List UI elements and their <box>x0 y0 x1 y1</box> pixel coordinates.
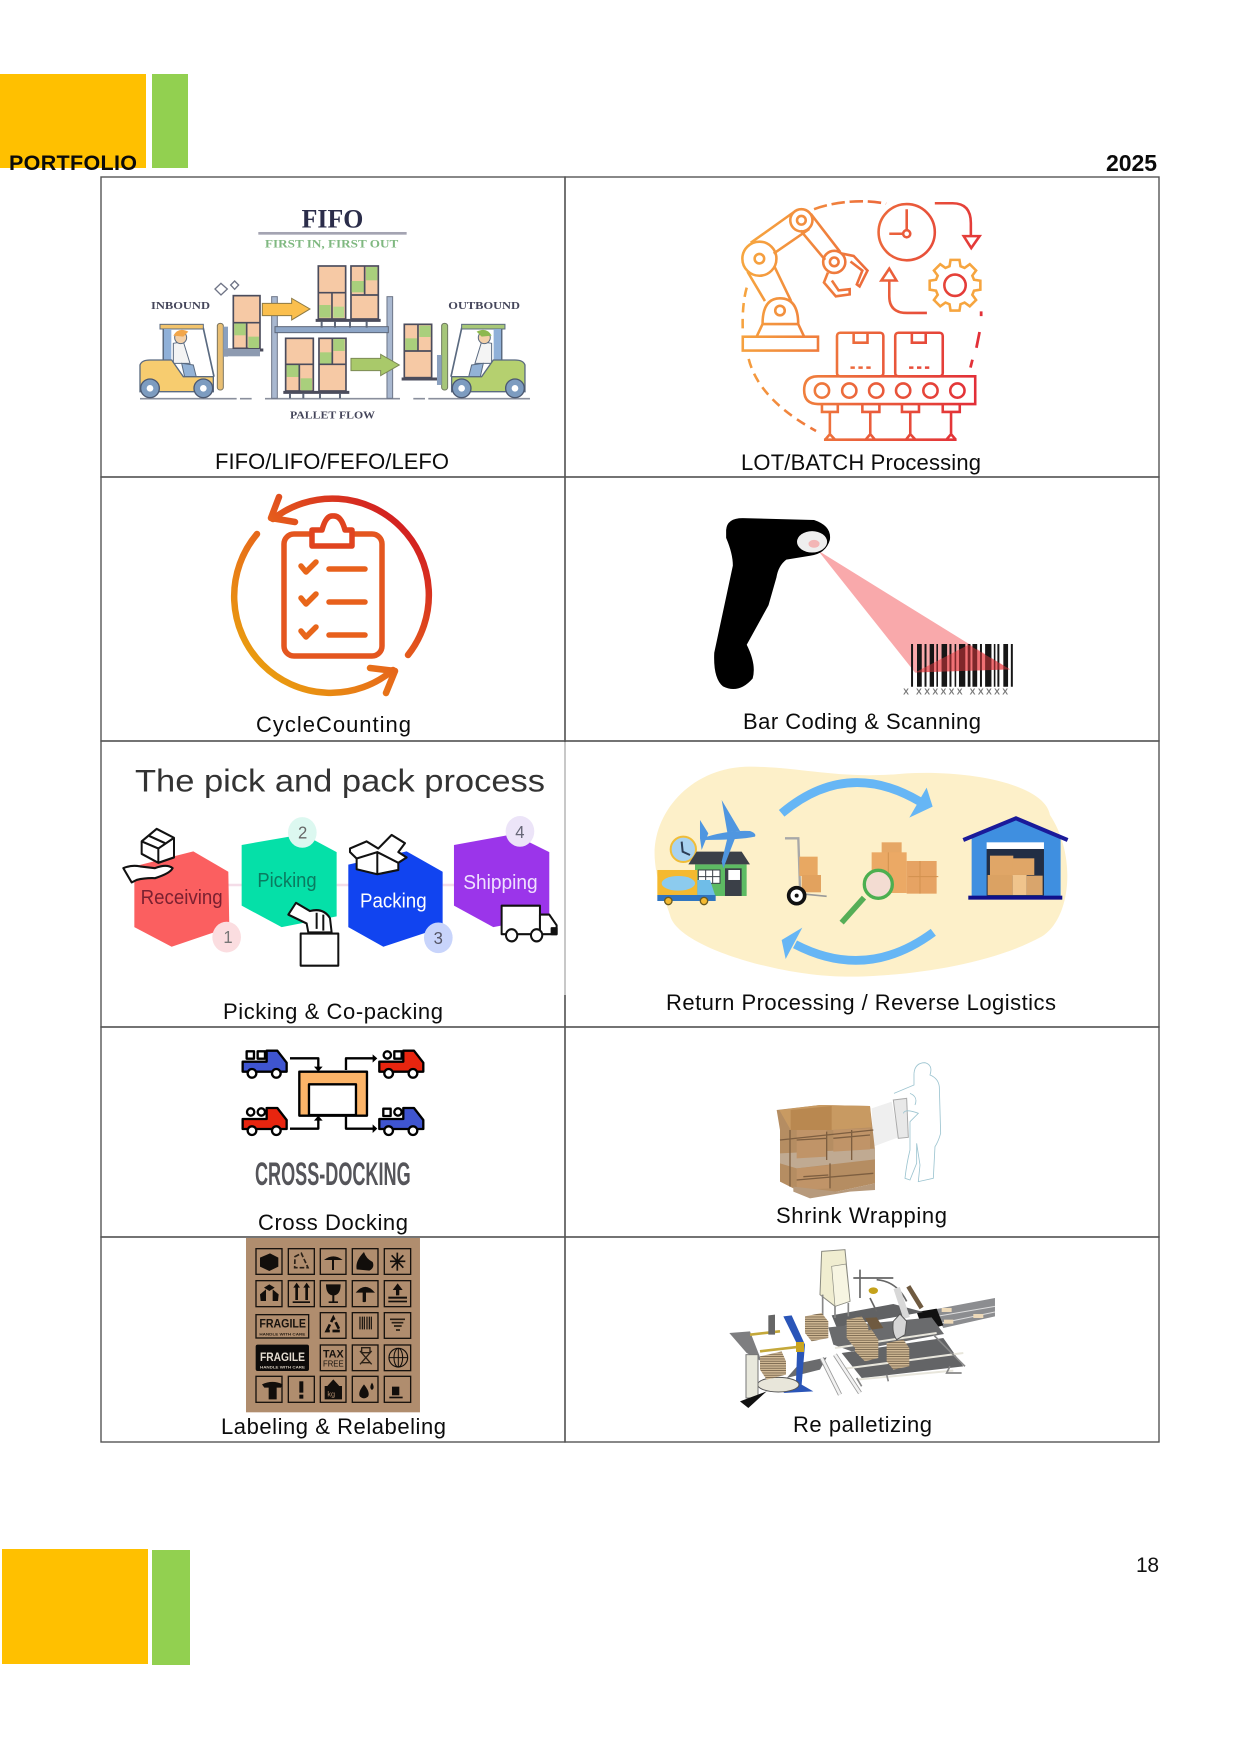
panel: LOT/BATCH <box>565 177 1159 477</box>
illustration: pick and pack process: Picking <box>257 870 317 892</box>
illustration: cross-docking diagram <box>243 1051 423 1192</box>
illustration: pick and pack process: 4 <box>515 821 525 842</box>
illustration: FIFO pallet flow <box>140 204 530 421</box>
illustration: pick and pack process: 2 <box>298 822 307 843</box>
illustration: pick and pack process: Shipping <box>463 871 538 894</box>
header block: green <box>152 74 188 168</box>
illustration: packaging labels <box>246 1238 420 1412</box>
illustration: FIFO pallet flow: INBOUND <box>151 301 210 312</box>
caption: Return Processing: Return Processing / Reverse Logistics <box>666 990 1056 1015</box>
panel: Cycle Counting <box>101 477 565 741</box>
illustration: barcode scanner <box>714 518 1015 697</box>
footer block: yellow <box>2 1549 148 1664</box>
illustration: packaging labels: TAX <box>323 1348 345 1360</box>
illustration: pick and pack process: Receiving <box>141 886 223 909</box>
caption: Re palletizing: Re palletizing <box>793 1412 932 1437</box>
caption: Picking: Picking & Co-packing <box>223 999 443 1024</box>
page number: 18 <box>1136 1554 1159 1577</box>
panel: Picking <box>101 741 565 1027</box>
caption: Bar Coding: Bar Coding & Scanning <box>743 709 981 734</box>
illustration: packaging labels: FRAGILE <box>260 1351 305 1364</box>
illustration: FIFO pallet flow: FIFO <box>302 204 363 233</box>
header block: yellow <box>0 74 146 168</box>
footer block: green <box>152 1550 190 1665</box>
illustration: pick and pack process: Packing <box>360 890 427 913</box>
panel: Re palletizing <box>565 1237 1159 1442</box>
illustration: pick and pack process <box>123 763 557 966</box>
illustration: packaging labels: FRAGILE <box>259 1318 306 1331</box>
illustration: barcode scanner: X XXXXXX XXXXX <box>903 687 1008 697</box>
illustration: packaging labels: FREE <box>323 1359 344 1369</box>
panel: Labeling <box>101 1237 565 1442</box>
caption: Shrink Wrapping: Shrink Wrapping <box>776 1203 947 1228</box>
icon: robot arm and conveyor <box>742 201 981 440</box>
illustration: shrink wrapped pallet <box>777 1063 941 1198</box>
caption: Cross Docking: Cross Docking <box>258 1210 408 1235</box>
panel: Return Processing <box>565 741 1159 1027</box>
illustration: FIFO pallet flow: OUTBOUND <box>448 301 520 312</box>
illustration: FIFO pallet flow: FIRST IN, FIRST OUT <box>265 236 398 250</box>
panel: FIFO <box>101 177 565 477</box>
illustration: reverse logistics <box>655 767 1068 977</box>
panel: Bar Coding <box>565 477 1159 741</box>
illustration: cross-docking diagram: CROSS-DOCKING <box>255 1156 411 1192</box>
caption: Labeling: Labeling & Relabeling <box>221 1414 446 1439</box>
heading: PORTFOLIO: PORTFOLIO <box>9 151 137 175</box>
caption: Cycle Counting: CycleCounting <box>256 712 411 737</box>
illustration: FIFO pallet flow: PALLET FLOW <box>290 410 375 421</box>
panel: Cross Docking <box>101 1027 565 1237</box>
illustration: packaging labels: HANDLE WITH CARE <box>259 1331 306 1336</box>
illustration: palletizing line <box>729 1250 995 1408</box>
illustration: pick and pack process: 3 <box>434 928 443 948</box>
illustration: pick and pack process: 1 <box>223 927 233 947</box>
illustration: packaging labels: kg <box>327 1390 335 1399</box>
heading: year: 2025 <box>1106 150 1157 176</box>
icon: clipboard cycle <box>234 497 429 693</box>
caption: LOT/BATCH: LOT/BATCH Processing <box>741 450 981 475</box>
illustration: packaging labels: HANDLE WITH CARE <box>260 1364 305 1369</box>
caption: FIFO: FIFO/LIFO/FEFO/LEFO <box>215 449 449 474</box>
illustration: pick and pack process: The pick and pack process <box>135 763 545 799</box>
panel: Shrink Wrapping <box>565 1027 1159 1237</box>
